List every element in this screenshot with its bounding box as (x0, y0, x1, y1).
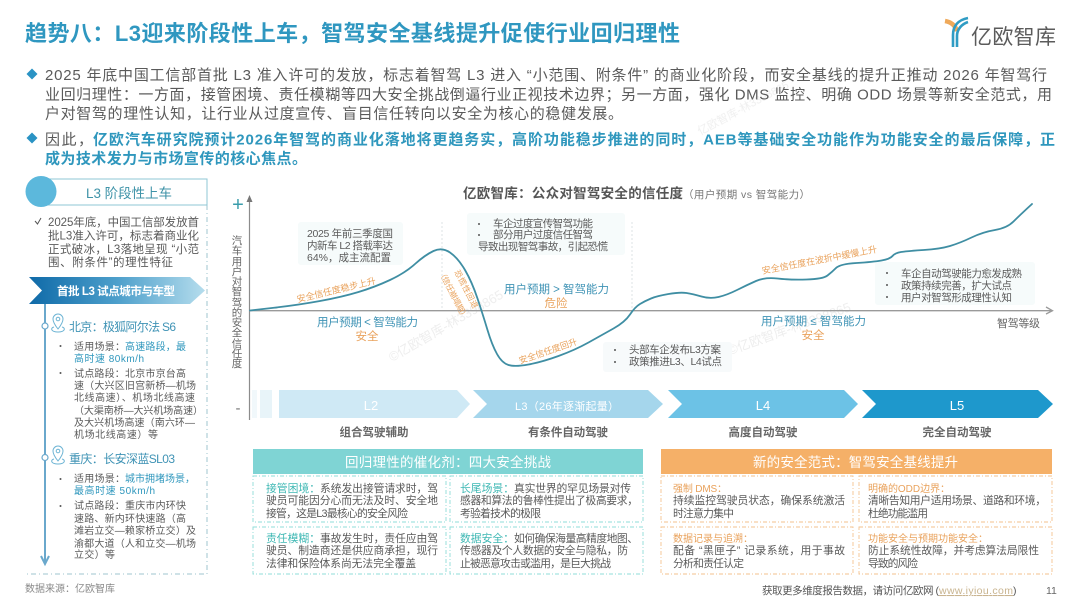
cell: functional safety (859, 527, 1052, 574)
cell: takeover: 接管，这是L3最核心的安全风险 (266, 506, 408, 520)
callout: over-marketing: 部分用户过度信任智驾 (493, 228, 593, 241)
cell: takeover: 驶员可能因分心而无法及时、安全地 (266, 493, 438, 507)
trust curve line (250, 204, 1032, 366)
text block: L3 summary: 2025年底，中国工信部发放首 (48, 215, 199, 229)
text block: forecast paragraph (26, 130, 1055, 168)
text block: Beijing: 速（大兴区旧宫新桥—机场 (74, 379, 196, 392)
chevron: L2: L2 (364, 398, 378, 413)
zone label: safe L4: 用户预期 ≤ 智驾能力 (761, 314, 866, 328)
zone label: safe L2: 用户预期 < 智驾能力 (317, 315, 418, 329)
cell: liability: 事故发生时，责任应由驾 (320, 531, 438, 545)
cell: data security: 如何确保海量高精度地图、 (514, 531, 638, 545)
icon: location pin Beijing (52, 314, 64, 332)
text block: Chongqing: 渝都大道（人和立交—机场 (74, 537, 196, 550)
cell: functional safety: 导致的风险 (868, 556, 918, 570)
curve label: panic drop: 恐慌性回退 (452, 268, 480, 310)
panel header: 回归理性的催化剂：四大安全挑战 (345, 454, 552, 470)
text block: L3 summary: 批L3准入许可，标志着商业化 (48, 228, 200, 242)
source note: 数据来源：亿欧智库 (25, 582, 115, 595)
curve label: slow rise: 安全信任度在波折中缓慢上升 (761, 243, 878, 276)
level captions (340, 425, 992, 439)
cell: liability: 驶员、制造商还是供应商承担，现行 (266, 543, 438, 557)
callout: over-marketing: 导致出现智驾事故，引起恐慌 (478, 240, 608, 253)
chart: public trust curve (232, 185, 1052, 420)
callout: maturity: 政策持续完善，扩大试点 (901, 279, 1012, 292)
panel: L3 pilot (25, 176, 207, 574)
callout: L3 plans: 政策推进L3、L4试点 (629, 355, 722, 368)
panel header (253, 449, 643, 474)
text block: Beijing: 北线高速）、机场北线高速 (74, 391, 195, 404)
cell: DMS (661, 476, 853, 522)
cell: data security: 传感器及个人数据的安全与隐私，防 (460, 543, 628, 557)
text block: forecast paragraph: 因此， (45, 132, 93, 148)
title: 趋势八：L3迎来阶段性上车，智驾安全基线提升促使行业回归理性 (25, 21, 680, 46)
cell: DMS: 持续监控驾驶员状态，确保系统激活 (673, 493, 845, 507)
axes: - (236, 400, 240, 417)
chevron: L2 (279, 390, 470, 418)
callout: L2 penetration: 64%，成主流配置 (307, 251, 391, 264)
cell: ODD (859, 476, 1052, 522)
axes (232, 194, 1052, 420)
panel: four safety challenges (253, 449, 643, 574)
callout: over-marketing (467, 213, 625, 255)
footer link (762, 584, 1016, 597)
zone label: safe L4 (761, 314, 866, 342)
cell: long tail: 长尾场景： (460, 481, 514, 495)
footer link: www.iyiou.com (938, 585, 1013, 597)
text block: Chongqing (60, 451, 196, 561)
icon: location pin Chongqing (52, 446, 64, 464)
zone label: safe L2 (317, 315, 418, 343)
cell: data security: 止被恶意攻击或滥用，是巨大挑战 (460, 556, 611, 570)
text block: Chongqing: 滩岩立交—赖家桥立交）及 (74, 524, 196, 537)
text block: Chongqing: 速路、新内环快速路（高 (74, 512, 186, 525)
callout: L2 penetration: 2025 年前三季度国 (307, 227, 393, 240)
text block: Chongqing: 立交）等 (74, 548, 115, 561)
cell: long tail: 感器和算法的鲁棒性提出了极高要求， (460, 493, 638, 507)
cell: liability: 法律和保险体系尚无法完全覆盖 (266, 556, 416, 570)
panel: new safety paradigm (661, 449, 1052, 574)
x axis label: 智驾等级 (997, 316, 1040, 330)
text block: Chongqing: 适用场景： (74, 472, 125, 485)
chevron: L4 (668, 390, 858, 418)
text block: intro paragraph (26, 66, 1052, 122)
logo: 亿欧智库 (945, 18, 1056, 49)
cell: data recording: 分析和责任认定 (673, 556, 744, 570)
text block: Beijing: （大渠南桥—大兴机场高速） (74, 404, 203, 417)
text block: intro paragraph: 业回归理性：一方面，接管困境、责任模糊等四大安全挑战倒逼行业正视技术边界；另一方面，强化 DMS 监控、明确 ODD 场景等新安全范式，用 (45, 86, 1052, 104)
text block: L3 summary: 围、附条件”的理性特征 (48, 255, 174, 269)
chart title: 亿欧智库：公众对智驾安全的信任度 (463, 185, 684, 201)
cell: long tail: 真实世界的罕见场景对传 (514, 481, 631, 495)
text block: L3 summary (35, 215, 200, 269)
text block: Chongqing: 重庆：长安深蓝SL03 (69, 451, 175, 466)
callout: maturity: 用户对智驾形成理性认知 (901, 291, 1012, 304)
text block: Beijing: 试点路段：北京市京台高 (74, 367, 186, 380)
text: 亿欧智库-林3398865 (695, 78, 791, 138)
chevron: L4: L4 (756, 398, 770, 413)
text block: Beijing (60, 319, 203, 441)
callout: over-marketing: 车企过度宣传智驾功能 (493, 217, 594, 230)
text block: Beijing: 机场北线高速）等 (74, 428, 158, 441)
cell: data security: 数据安全： (460, 531, 514, 545)
chevron: L5 (862, 390, 1053, 418)
chart title (463, 185, 810, 201)
cell: takeover: 接管困境： (266, 481, 320, 495)
cell: data security (450, 527, 643, 574)
zone label: danger (504, 282, 609, 310)
timeline arrow (41, 304, 49, 564)
cell: DMS: 时注意力集中 (673, 506, 734, 520)
cell: DMS: 强制 DMS： (673, 482, 727, 495)
cell: ODD: 杜绝功能滥用 (868, 506, 928, 520)
zone label: safe L4: 安全 (802, 328, 825, 342)
text block: L3 summary: 正式破冰，L3落地呈现 “小范 (48, 242, 200, 256)
zone label: danger: 用户预期 > 智驾能力 (504, 282, 609, 296)
ribbon: pilot cities heading: 首批 L3 试点城市与车型 (57, 284, 175, 298)
text block: forecast paragraph: 成为技术发力与市场宣传的核心焦点。 (45, 150, 307, 168)
cell: takeover: 系统发出接管请求时，驾 (320, 481, 438, 495)
curve label: steady rise: 安全信任度稳步上升 (296, 275, 377, 304)
cell: liability (253, 527, 446, 574)
panel heading: L3 阶段性上车: L3 阶段性上车 (86, 185, 172, 201)
callout: L2 penetration (298, 222, 403, 265)
cell: functional safety: 功能安全与预期功能安全： (868, 532, 988, 545)
chevron: L3 (473, 390, 663, 418)
cell: liability: 责任模糊： (266, 531, 320, 545)
level captions: 完全自动驾驶 (922, 425, 992, 439)
level captions: 高度自动驾驶 (728, 425, 798, 439)
cell: data recording: 配备 “黑匣子” 记录系统，用于事故 (673, 543, 845, 557)
text: ©亿欧智库-林3398865 (726, 299, 853, 358)
cell: long tail (450, 476, 643, 522)
zone label: danger: 危险 (544, 296, 568, 310)
callout: L2 penetration: 内新车 L2 搭载率达 (307, 239, 394, 252)
callout: L3 plans (603, 342, 732, 372)
text block: Chongqing: 试点路段：重庆市内环快 (74, 499, 186, 512)
cell: ODD: 明确的ODD边界： (868, 482, 950, 495)
panel header: 新的安全范式：智驾安全基线提升 (753, 454, 958, 470)
text: ©亿欧智库-林3398865 (386, 287, 506, 365)
footer link: 获取更多维度报告数据，请访问亿欧网 ( (762, 584, 940, 597)
curve label: trust recovers: 安全信任度回升 (517, 335, 579, 366)
chevron: L3: L3（26年逐渐起量） (515, 399, 619, 413)
callout: maturity: 车企自动驾驶能力愈发成熟 (901, 267, 1022, 280)
text block: Beijing: 北京：极狐阿尔法 S6 (69, 319, 176, 334)
cell: data recording (661, 527, 853, 574)
chevron: L5: L5 (950, 398, 964, 413)
text block: intro paragraph: 户对智驾的理性认知，让行业从过度宣传、盲目信任转向以安全为核心的稳健发展。 (45, 104, 623, 122)
zone label: safe L2: 安全 (356, 329, 379, 343)
text block: intro paragraph: 2025 年底中国工信部首批 L3 准入许可的发放，标志着智驾 L3 进入 “小范围、附条件” 的商业化阶段，而安全基线的提升正推动 2026 年智驾行 (45, 66, 1047, 84)
panel header (661, 449, 1052, 474)
text block: Beijing: 高时速 80km/h (74, 352, 144, 365)
cell: takeover (253, 476, 446, 522)
text block: Beijing: 高速路段，最 (125, 340, 186, 353)
text block: Beijing: 及大兴机场高速（南六环— (74, 416, 195, 429)
text block: Chongqing: 城市拥堵场景， (125, 472, 195, 485)
logo: 亿欧智库: 亿欧智库 (971, 26, 1056, 49)
text block: Chongqing: 最高时速 50km/h (74, 484, 155, 497)
level captions: 组合驾驶辅助 (340, 425, 408, 439)
chart title: （用户预期 vs 智驾能力） (683, 188, 810, 201)
y axis label: 汽车用户对智驾的安全信任度 (232, 234, 243, 370)
axes: + (232, 194, 244, 216)
footer link: ) (1013, 585, 1016, 597)
page number: 11 (1046, 585, 1057, 597)
level captions: 有条件自动驾驶 (528, 425, 608, 439)
callout: L3 plans: 头部车企发布L3方案 (629, 343, 722, 356)
callout: maturity (875, 262, 1035, 305)
text block: Beijing: 适用场景： (74, 340, 125, 353)
curve label: panic drop: （信任崩塌期） (437, 268, 470, 321)
level chevrons (252, 390, 1053, 439)
cell: ODD: 清晰告知用户适用场景、道路和环境， (868, 493, 1046, 507)
text block: forecast paragraph: 亿欧汽车研究院预计2026年智驾的商业化落地将更趋务实，高阶功能稳步推进的同时，AEB等基础安全功能作为功能安全的最后保障，正 (93, 130, 1055, 148)
cell: functional safety: 防止系统性故障，并考虑算法局限性 (868, 543, 1039, 557)
ribbon: pilot cities heading (29, 277, 205, 304)
cell: data recording: 数据记录与追溯： (673, 532, 753, 545)
cell: long tail: 考验着技术的极限 (460, 506, 541, 520)
panel heading: L3 阶段性上车 (26, 176, 207, 207)
